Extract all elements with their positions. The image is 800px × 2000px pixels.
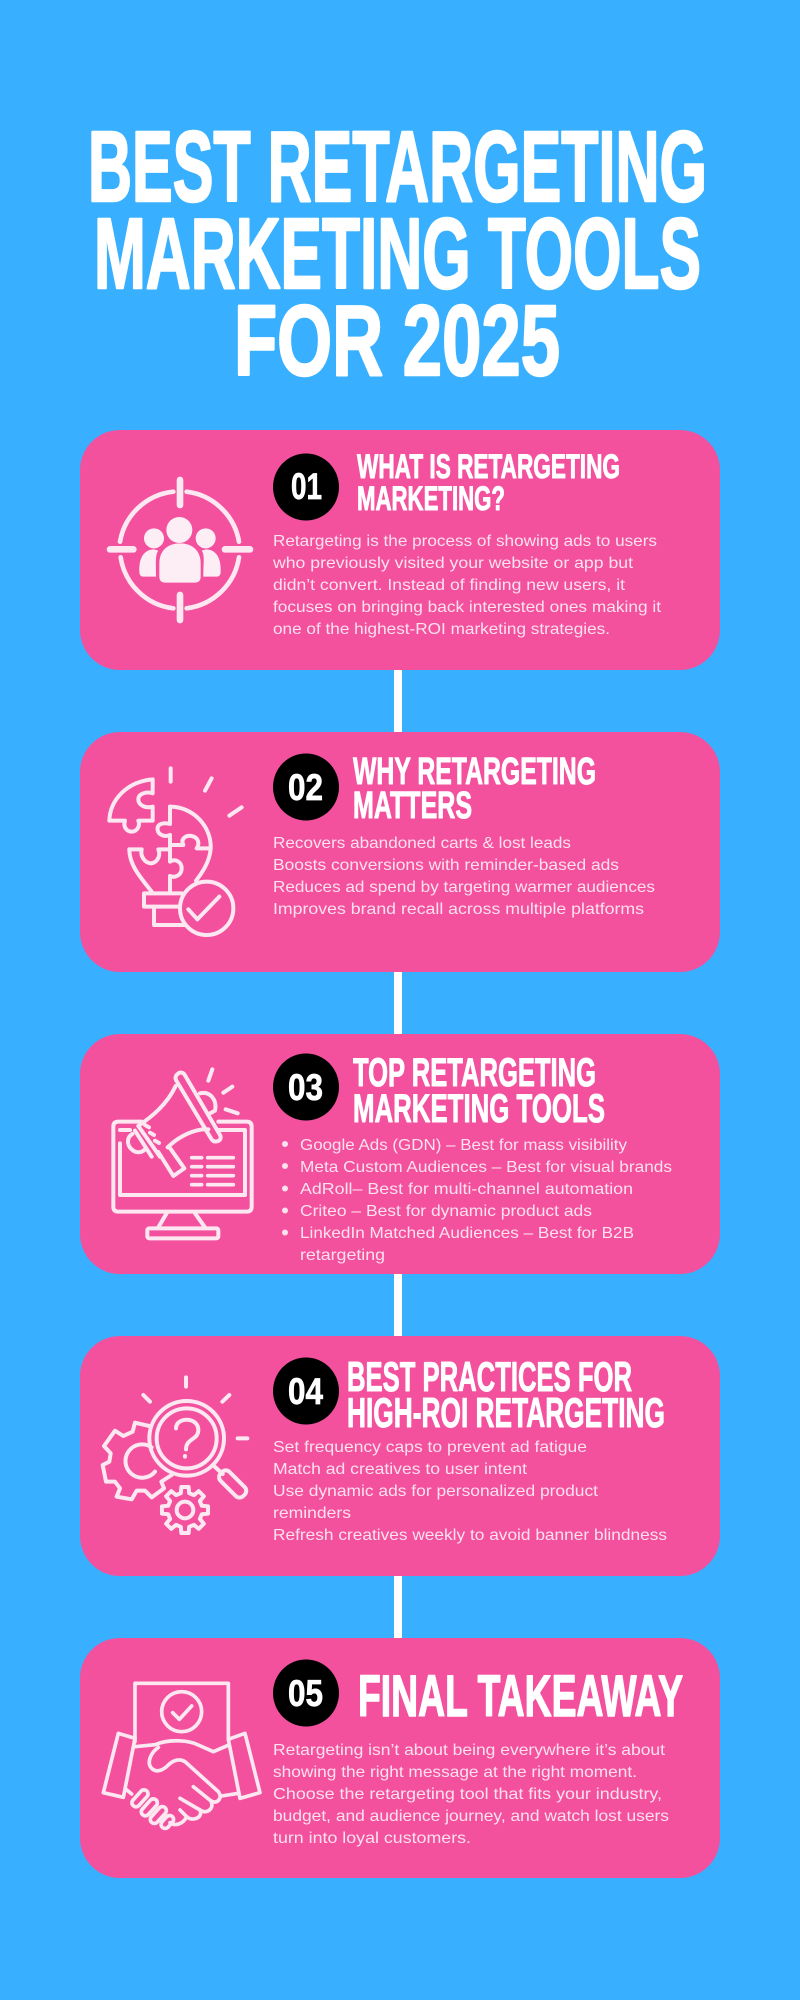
heading 04: BEST PRACTICES FOR bbox=[347, 1353, 632, 1400]
body text 05 bbox=[273, 1742, 669, 1847]
heading 04 bbox=[347, 1353, 665, 1436]
number badge 02: 02 bbox=[288, 767, 323, 808]
body text 01: one of the highest-ROI marketing strategies. bbox=[273, 621, 610, 638]
heading 03: MARKETING TOOLS bbox=[353, 1087, 605, 1131]
panel: final takeaway bbox=[80, 1638, 720, 1878]
number badge 04 bbox=[273, 1358, 339, 1424]
body text 05: budget, and audience journey, and watch lost users bbox=[273, 1808, 669, 1825]
panel: best practices for high-ROI retargeting bbox=[80, 1336, 720, 1576]
body text 01: didn’t convert. Instead of finding new users, it bbox=[273, 577, 626, 594]
icon: target with audience group bbox=[110, 480, 250, 620]
body text 05: Retargeting isn’t about being everywhere it’s about bbox=[273, 1742, 666, 1759]
body text 05: turn into loyal customers. bbox=[273, 1830, 471, 1847]
body text 01 bbox=[272, 533, 662, 638]
body text 04: Use dynamic ads for personalized product bbox=[273, 1483, 599, 1500]
panel: why retargeting matters bbox=[80, 732, 720, 972]
heading 01 bbox=[357, 448, 620, 518]
body text 01: who previously visited your website or app but bbox=[272, 555, 634, 572]
icon: monitor with megaphone bbox=[113, 1069, 252, 1238]
body text 02: Recovers abandoned carts & lost leads bbox=[273, 835, 571, 852]
body text 02: Improves brand recall across multiple platforms bbox=[273, 901, 644, 918]
heading 03: TOP RETARGETING bbox=[353, 1051, 596, 1095]
icon: gears with magnifying glass bbox=[103, 1377, 248, 1533]
number badge 05: 05 bbox=[288, 1673, 323, 1714]
heading 02 bbox=[353, 751, 596, 827]
bulleted tool list: LinkedIn Matched Audiences – Best for B2B bbox=[300, 1225, 634, 1242]
number badge 04: 04 bbox=[288, 1371, 323, 1412]
title: FOR 2025 bbox=[234, 285, 560, 397]
title bbox=[88, 111, 707, 397]
icon: handshake with document bbox=[103, 1683, 260, 1830]
body text 04: Match ad creatives to user intent bbox=[273, 1461, 528, 1478]
heading 01: MARKETING? bbox=[357, 480, 505, 518]
heading 01: WHAT IS RETARGETING bbox=[357, 448, 620, 486]
body text 02 bbox=[273, 835, 655, 918]
panel: what is retargeting marketing bbox=[80, 430, 720, 670]
bulleted tool list: Criteo – Best for dynamic product ads bbox=[300, 1203, 592, 1220]
body text 04: Refresh creatives weekly to avoid banner blindness bbox=[273, 1527, 667, 1544]
body text 04: reminders bbox=[273, 1505, 351, 1522]
heading 02: WHY RETARGETING bbox=[353, 751, 596, 793]
panel: top retargeting marketing tools bbox=[80, 1034, 720, 1274]
bulleted tool list: Meta Custom Audiences – Best for visual brands bbox=[300, 1159, 672, 1176]
number badge 02 bbox=[273, 754, 339, 820]
icon: puzzle light bulb with check bbox=[109, 768, 242, 935]
bulleted tool list bbox=[282, 1137, 672, 1264]
heading 03 bbox=[353, 1051, 605, 1131]
body text 05: showing the right message at the right moment. bbox=[273, 1764, 637, 1781]
body text 05: Choose the retargeting tool that fits your industry, bbox=[273, 1786, 662, 1803]
body text 02: Reduces ad spend by targeting warmer audiences bbox=[273, 879, 655, 896]
number badge 01 bbox=[273, 454, 339, 520]
number badge 01: 01 bbox=[291, 466, 322, 507]
body text 04: Set frequency caps to prevent ad fatigue bbox=[273, 1439, 587, 1456]
number badge 03: 03 bbox=[288, 1067, 323, 1108]
body text 01: Retargeting is the process of showing ads to users bbox=[273, 533, 657, 550]
connector line between panels bbox=[394, 660, 402, 1650]
bulleted tool list: Google Ads (GDN) – Best for mass visibility bbox=[300, 1137, 627, 1154]
body text 01: focuses on bringing back interested ones making it bbox=[273, 599, 662, 616]
body text 04 bbox=[273, 1439, 667, 1544]
number badge 03 bbox=[273, 1054, 339, 1120]
bulleted tool list: retargeting bbox=[300, 1247, 385, 1264]
number badge 05 bbox=[273, 1660, 339, 1726]
bulleted tool list: AdRoll– Best for multi-channel automation bbox=[300, 1181, 633, 1198]
heading 02: MATTERS bbox=[353, 785, 472, 827]
body text 02: Boosts conversions with reminder-based ads bbox=[273, 857, 619, 874]
